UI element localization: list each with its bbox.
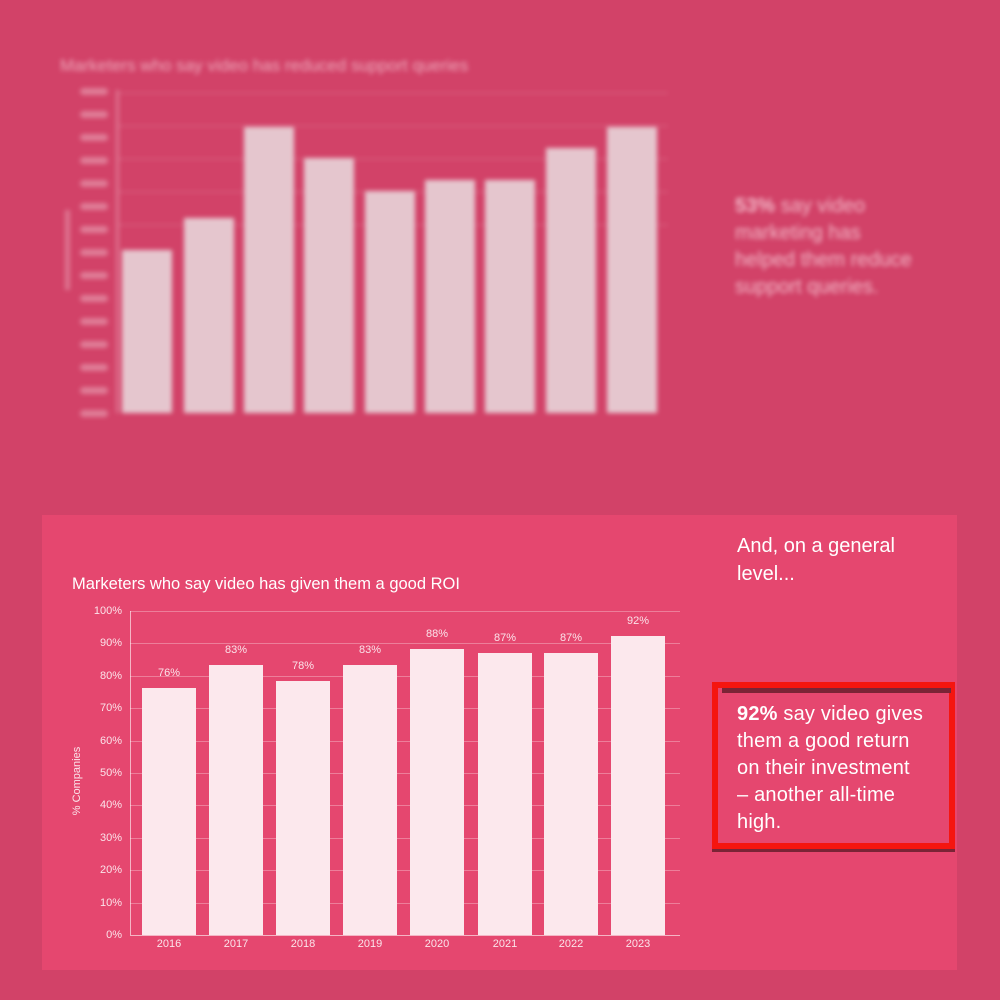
bar chart: 92% — [627, 615, 649, 627]
intro text — [737, 535, 895, 585]
bar chart: 100% — [94, 605, 122, 617]
intro text: level... — [737, 563, 795, 585]
bar chart: 88% — [426, 628, 448, 640]
bar chart: 87% — [560, 632, 582, 644]
callout: 92% ROI highlighted — [712, 682, 955, 849]
callout: 53% support queries: marketing has — [735, 222, 861, 244]
bar chart: 2018 — [291, 938, 315, 950]
bar chart: 20% — [100, 864, 122, 876]
y axis label: % Companies — [71, 747, 83, 815]
bar chart: 80% — [100, 670, 122, 682]
callout: 53% support queries — [733, 195, 914, 298]
bar chart: 83% — [225, 644, 247, 656]
panel: top blurred chart — [58, 56, 662, 420]
bar chart: 78% — [292, 660, 314, 672]
callout: 53% support queries: support queries. — [735, 276, 878, 298]
bar chart: 2020 — [425, 938, 449, 950]
callout: 92% ROI highlighted: them a good return — [737, 730, 910, 752]
panel: ROI chart — [42, 515, 957, 970]
bar chart: 70% — [100, 702, 122, 714]
bar chart: 10% — [100, 897, 122, 909]
bar chart — [94, 605, 680, 950]
bar chart: 2019 — [358, 938, 382, 950]
bar chart: 83% — [359, 644, 381, 656]
callout: 92% ROI highlighted: high. — [737, 811, 781, 833]
top chart title: Marketers who say video has reduced support queries — [60, 56, 468, 75]
bar chart: 2022 — [559, 938, 583, 950]
bar chart: 2021 — [493, 938, 517, 950]
bar chart: 60% — [100, 735, 122, 747]
bar chart: 90% — [100, 637, 122, 649]
callout: 92% ROI highlighted: on their investment — [737, 757, 910, 779]
bar chart: 30% — [100, 832, 122, 844]
bar chart: 0% — [106, 929, 122, 941]
callout: 53% support queries: 53% say video — [735, 195, 865, 217]
bar chart: 50% — [100, 767, 122, 779]
callout: 92% ROI highlighted: 92% say video gives — [737, 703, 923, 725]
bar chart: 2017 — [224, 938, 248, 950]
bar chart: 87% — [494, 632, 516, 644]
callout: 53% support queries: helped them reduce — [735, 249, 912, 271]
callout: 92% ROI highlighted: – another all-time — [737, 784, 895, 806]
bar chart: 2016 — [157, 938, 181, 950]
intro text: And, on a general — [737, 535, 895, 557]
top chart bars — [63, 86, 662, 420]
bar chart: 40% — [100, 799, 122, 811]
bar chart: 76% — [158, 667, 180, 679]
chart title: Marketers who say video has given them a good ROI — [72, 575, 460, 593]
bar chart: 2023 — [626, 938, 650, 950]
